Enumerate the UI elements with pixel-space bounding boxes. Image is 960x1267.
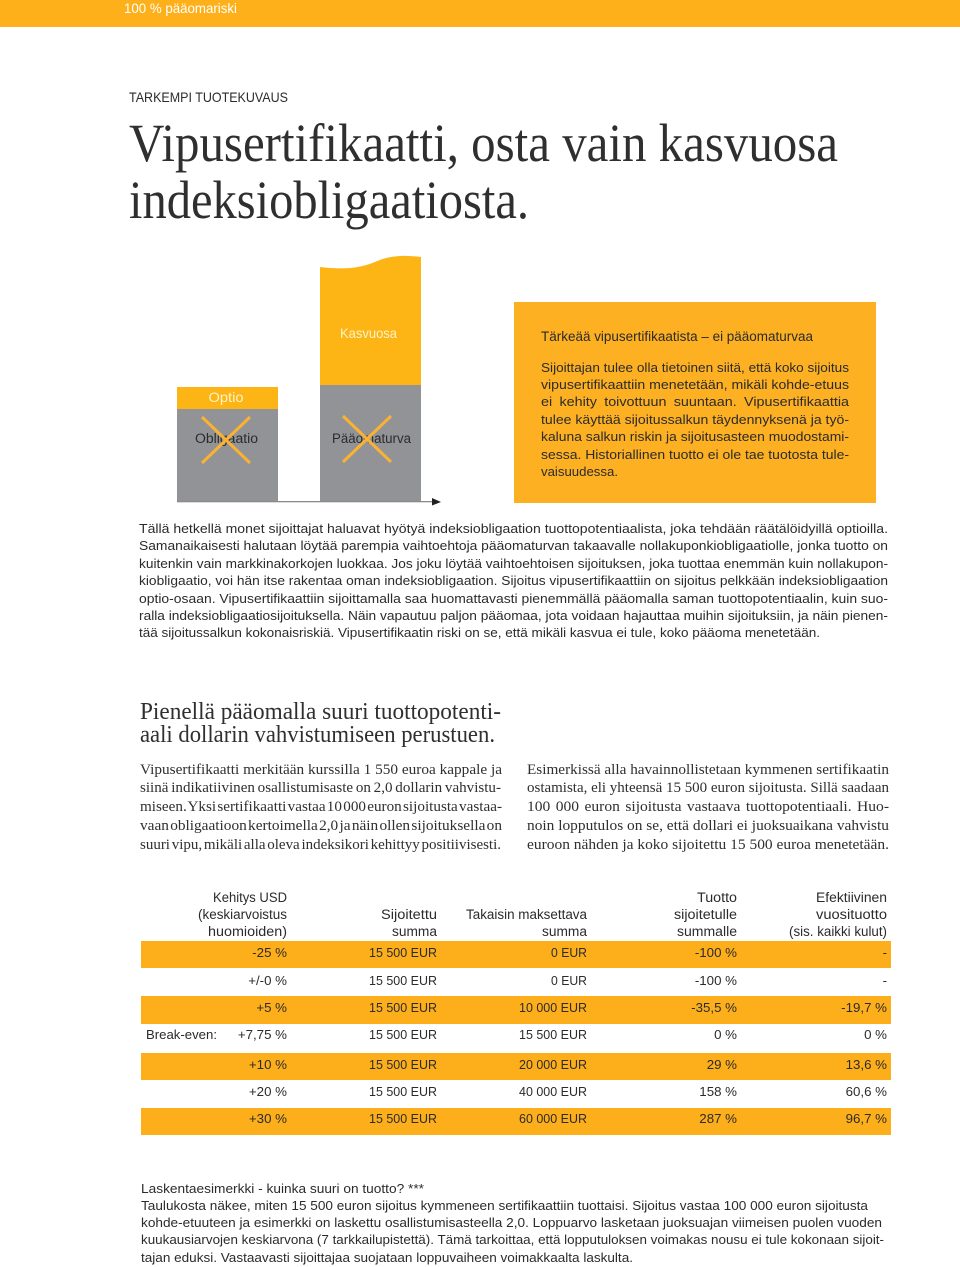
- footnote: kohde-etuuteen ja esimerkki on laskettu osallistumisasteella 2,0. Loppuarvo lasketaan juoksuajan viimeisen puolen vuoden: [141, 1215, 882, 1230]
- row: +30 %: 15 500 EUR: [369, 1111, 437, 1126]
- subheading: [140, 699, 501, 748]
- row: +10 %: 15 500 EUR: [369, 1057, 437, 1072]
- row: -25 %: [252, 945, 887, 960]
- row: -25 %: 15 500 EUR: [369, 945, 437, 960]
- panel text: ei kehity toivottuun suuntaan. Vipusertifikaattia: [541, 394, 850, 409]
- title: Vipusertifikaatti, osta vain kasvuosa: [129, 113, 838, 173]
- row: +20 %: +20 %: [249, 1084, 287, 1099]
- panel text: [541, 360, 850, 479]
- footnote: Taulukosta näkee, miten 15 500 euron sijoitus kymmeneen sertifikaattiin tuottaisi. Sijoitus vastaa 100 000 euron sijoitusta: [141, 1198, 869, 1213]
- panel text: sessa. Historiallinen tuotto ei ole tae tuotosta tule-: [541, 447, 849, 462]
- title: [129, 113, 838, 230]
- bar: pääomaturva and kasvuosa: Kasvuosa: [340, 325, 397, 341]
- row: break-even: 0 %: [714, 1027, 737, 1042]
- row: +20 %: 15 500 EUR: [369, 1084, 437, 1099]
- footnote: Laskentaesimerkki - kuinka suuri on tuotto? ***: [141, 1181, 424, 1196]
- text column: right: [527, 762, 890, 853]
- table header: summa: [542, 924, 587, 939]
- row: +10 %: 29 %: [707, 1057, 737, 1072]
- row: +/-0 %: 15 500 EUR: [369, 973, 437, 988]
- row: +30 %: [249, 1111, 887, 1126]
- row: +10 %: 13,6 %: [846, 1057, 887, 1072]
- text column: right: Esimerkissä alla havainnollistetaan kymmenen sertifikaatin: [527, 762, 890, 778]
- intro paragraph: kiobligaatio, voi hän itse rakentaa oman indeksiobligaation. Sijoitus vipusertifikaattiin on sijoitus pelkkään indeksiobligaation: [139, 573, 888, 588]
- title: indeksiobligaatiosta.: [129, 170, 529, 230]
- top orange band: [0, 0, 960, 27]
- intro paragraph: ralla indeksiobligaatiosijoituksella. Näin vapautuu paljon pääomaa, jota voidaan hajauttaa muihin sijoituksiin, ja näin pienen-: [139, 608, 888, 623]
- text column: right: euroon nähden ja koko sijoitettu 15 500 euroa menetetään.: [527, 837, 889, 853]
- row: +20 %: [249, 1084, 887, 1099]
- row: +/-0 %: -100 %: [695, 973, 737, 988]
- row: +5 %: -19,7 %: [841, 1000, 887, 1015]
- row: +30 %: 96,7 %: [846, 1111, 887, 1126]
- intro paragraph: Samanaikaisesti halutaan löytää parempia vaihtoehtoja pääomaturvan takaavalle nollakuponkiobligaatiolle, jonka tuotto on: [139, 538, 888, 553]
- row: +20 %: 60,6 %: [846, 1084, 887, 1099]
- intro paragraph: optio-osaan. Vipusertifikaattiin sijoittamalla saa huomattavasti pienemmällä pääomalla saman tuottopotentiaalin, kuin suo-: [139, 591, 888, 606]
- row: +5 %: 10 000 EUR: [519, 1000, 587, 1015]
- row: +30 %: 287 %: [699, 1111, 737, 1126]
- text column: right: noin lopputulos on se, että dollari ei juoksuaikana vahvistu: [527, 818, 890, 834]
- text column: right: 100 000 euron sijoitusta vastaava tuottopotentiaali. Huo-: [527, 799, 889, 815]
- section label: TARKEMPI TUOTEKUVAUS: [129, 89, 288, 105]
- row: +/-0 %: +/-0 %: [248, 973, 287, 988]
- table header: [198, 890, 887, 939]
- table header: (keskiarvoistus: [198, 907, 287, 922]
- text column: right: ostamista, eli yhteensä 15 500 euron sijoitusta. Sillä saadaan: [527, 780, 889, 796]
- table header: (sis. kaikki kulut): [789, 924, 887, 939]
- row: +5 %: [256, 1000, 887, 1015]
- row: -25 %: 0 EUR: [551, 945, 587, 960]
- table header: vuosituotto: [816, 907, 887, 922]
- row: +/-0 %: [248, 973, 887, 988]
- row: +30 %: +30 %: [249, 1111, 287, 1126]
- row: break-even: [146, 1027, 887, 1042]
- intro paragraph: kuitenkin vain markkinakorkojen luokkaa. Jos joku löytää vaihtoehtoisen sijoituksen, joka tuottaa enemmän kuin nollakupon-: [139, 556, 888, 571]
- bar: obligaatio and optio: [177, 387, 278, 502]
- panel text: vaisuudessa.: [541, 464, 618, 479]
- intro paragraph: Tällä hetkellä monet sijoittajat haluavat hyötyä indeksiobligaation tuottopotentiaalista, joka tehdään räätälöidyillä optioilla.: [139, 521, 888, 536]
- row: break-even: +7,75 %: [238, 1027, 287, 1042]
- bar: obligaatio and optio: Obligaatio: [195, 431, 258, 446]
- row: +/-0 %: 0 EUR: [551, 973, 587, 988]
- table header: Tuotto: [697, 890, 737, 905]
- panel heading: Tärkeää vipusertifikaatista – ei pääomaturvaa: [541, 329, 813, 344]
- intro paragraph: tää sijoitussalkun kokonaisriskiä. Vipusertifikaatin riski on se, että mikäli kasvua ei tule, koko pääoma menetetään.: [139, 625, 820, 640]
- text column: left: miseen. Yksi sertifikaatti vastaa 10 000 euron sijoitusta vastaa-: [140, 799, 502, 815]
- row: break-even: Break-even:: [146, 1027, 217, 1042]
- bar: pääomaturva and kasvuosa: [320, 256, 421, 502]
- row: +5 %: 15 500 EUR: [369, 1000, 437, 1015]
- row: break-even: 15 500 EUR: [519, 1027, 587, 1042]
- subheading: aali dollarin vahvistumiseen perustuen.: [140, 722, 495, 748]
- text column: left: suuri vipu, mikäli alla oleva indeksikori kehittyy positiivisesti.: [140, 837, 501, 853]
- table: [141, 890, 891, 1135]
- row: +20 %: 158 %: [699, 1084, 737, 1099]
- row: +5 %: -35,5 %: [691, 1000, 737, 1015]
- arrow: axis: [177, 498, 441, 506]
- panel text: Sijoittajan tulee olla tietoinen siitä, että koko sijoitus: [541, 360, 850, 375]
- diagram: bond and option bars: [177, 256, 441, 506]
- table header: summalle: [677, 924, 737, 939]
- row: -25 %: -25 %: [252, 945, 287, 960]
- panel: important note: [514, 302, 876, 503]
- row: -25 %: -100 %: [695, 945, 737, 960]
- row: +10 %: +10 %: [249, 1057, 287, 1072]
- row: +5 %: +5 %: [256, 1000, 287, 1015]
- text column: left: [140, 762, 503, 853]
- bar: pääomaturva and kasvuosa: Pääomaturva: [332, 431, 411, 446]
- table header: Efektiivinen: [816, 890, 887, 905]
- row: break-even: 15 500 EUR: [369, 1027, 437, 1042]
- subheading: Pienellä pääomalla suuri tuottopotenti-: [140, 699, 501, 725]
- table header: sijoitetulle: [674, 907, 737, 922]
- row: break-even: 0 %: [864, 1027, 887, 1042]
- footnote: [141, 1181, 884, 1265]
- row: -25 %: -: [883, 945, 887, 960]
- footnote: tajan eduksi. Vastaavasti sijoittajaa suojataan loppuvaiheen voimakkaalta laskulta.: [141, 1250, 633, 1265]
- bar: obligaatio and optio: Optio: [208, 389, 244, 405]
- row: +/-0 %: -: [883, 973, 887, 988]
- panel text: kaluna salkun riskin ja sijoitusasteen muodostami-: [541, 429, 849, 444]
- intro paragraph: [139, 521, 888, 640]
- panel text: vipusertifikaattiin menetetään, mikäli kohde-etuus: [541, 377, 850, 392]
- text column: left: siinä indikatiivinen osallistumisaste on 2,0 dollarin vahvistu-: [140, 780, 501, 796]
- panel text: tulee käyttää sijoitussalkun täydennyksenä ja työ-: [541, 412, 849, 427]
- row: +20 %: 40 000 EUR: [519, 1084, 587, 1099]
- table bands: [141, 941, 891, 1135]
- table header: summa: [392, 924, 437, 939]
- row: +30 %: 60 000 EUR: [519, 1111, 587, 1126]
- footnote: kuukausiarvojen keskiarvona (7 tarkkailupistettä). Tämä tarkoittaa, että lopputuloksen voimakas nousu ei tule kokonaan sijoit-: [141, 1232, 884, 1247]
- row: +10 %: 20 000 EUR: [519, 1057, 587, 1072]
- text column: left: vaan obligaatioon kertoimella 2,0 ja näin ollen sijoituksella on: [140, 818, 503, 834]
- table header: Sijoitettu: [381, 907, 437, 922]
- text column: left: Vipusertifikaatti merkitään kurssilla 1 550 euroa kappale ja: [140, 762, 502, 778]
- table header: Takaisin maksettava: [466, 907, 587, 922]
- table header: huomioiden): [208, 924, 287, 939]
- row: +10 %: [249, 1057, 887, 1072]
- table header: Kehitys USD: [213, 890, 287, 905]
- top orange band: 100 % pääomariski: [124, 0, 237, 16]
